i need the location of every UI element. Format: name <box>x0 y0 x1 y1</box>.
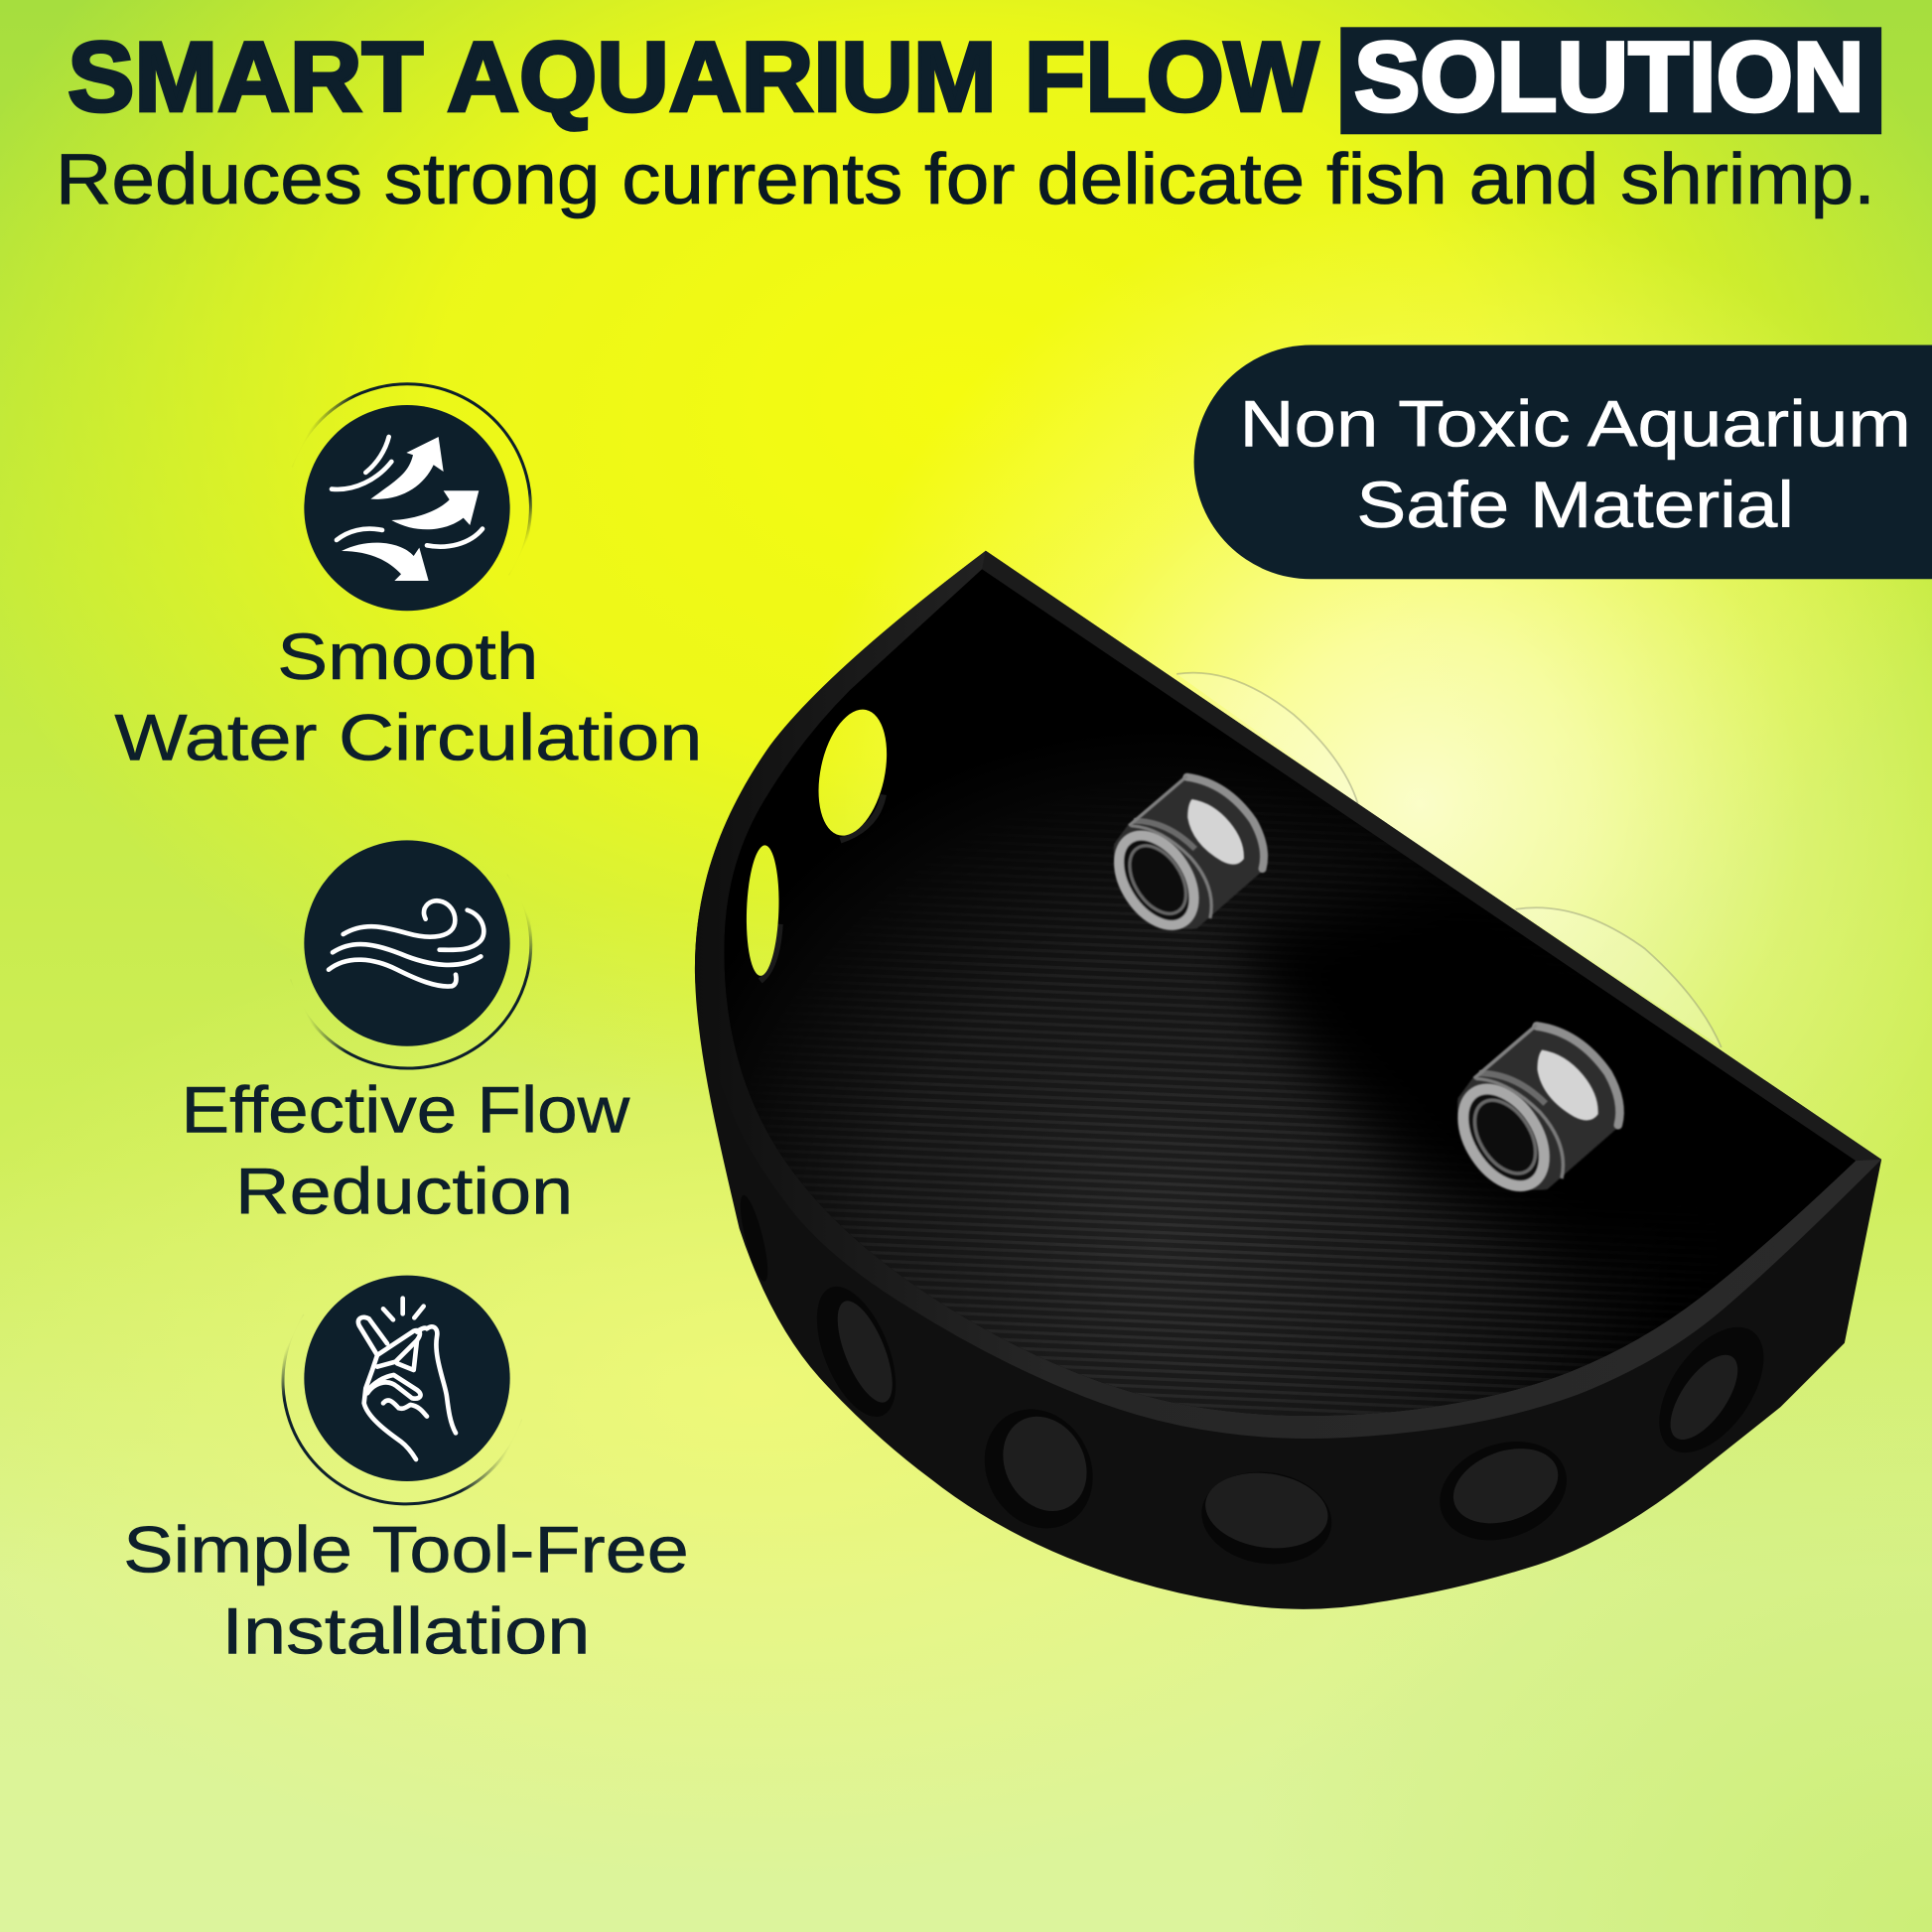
label: smooth water circulation <box>114 620 702 774</box>
label: smooth water circulation: Smooth <box>277 620 538 693</box>
label: effective flow reduction <box>181 1073 630 1227</box>
glass suction fitting 1 <box>1103 776 1265 939</box>
label: simple tool-free installation: Installation <box>221 1594 590 1668</box>
outer wall <box>695 551 1881 1609</box>
icon: simple tool-free installation <box>283 1276 523 1504</box>
label: effective flow reduction: Reduction <box>235 1154 573 1227</box>
label: effective flow reduction: Effective Flow <box>181 1073 630 1147</box>
interior <box>954 580 1854 1416</box>
hole highlights <box>826 1294 1750 1556</box>
wall holes <box>735 1193 1785 1573</box>
top rim <box>695 551 1881 1439</box>
label: smooth water circulation: Water Circulation <box>114 701 702 774</box>
callout: non toxic material: Non Toxic Aquarium <box>1240 386 1911 460</box>
title text: SMART AQUARIUM FLOW <box>68 23 1318 133</box>
product: half-round flow reducer <box>617 551 1932 1609</box>
label: simple tool-free installation <box>123 1513 689 1668</box>
title <box>68 23 1881 134</box>
icon: smooth water circulation <box>291 384 530 611</box>
icon: effective flow reduction <box>290 840 531 1068</box>
ribbed floor <box>751 798 1855 1416</box>
label: simple tool-free installation: Simple Tool-Free <box>123 1513 689 1587</box>
callout: non toxic material: Safe Material <box>1356 468 1794 541</box>
back rim <box>982 551 1881 1161</box>
suction cups behind product <box>1176 673 1722 1047</box>
callout: non toxic material <box>1194 345 1932 579</box>
highlighted word: SOLUTION <box>1354 23 1864 133</box>
subtitle: Reduces strong currents for delicate fish and shrimp. <box>56 140 1875 219</box>
hole rims in back wall <box>760 794 884 981</box>
glass suction fitting 2 <box>1447 1025 1621 1200</box>
